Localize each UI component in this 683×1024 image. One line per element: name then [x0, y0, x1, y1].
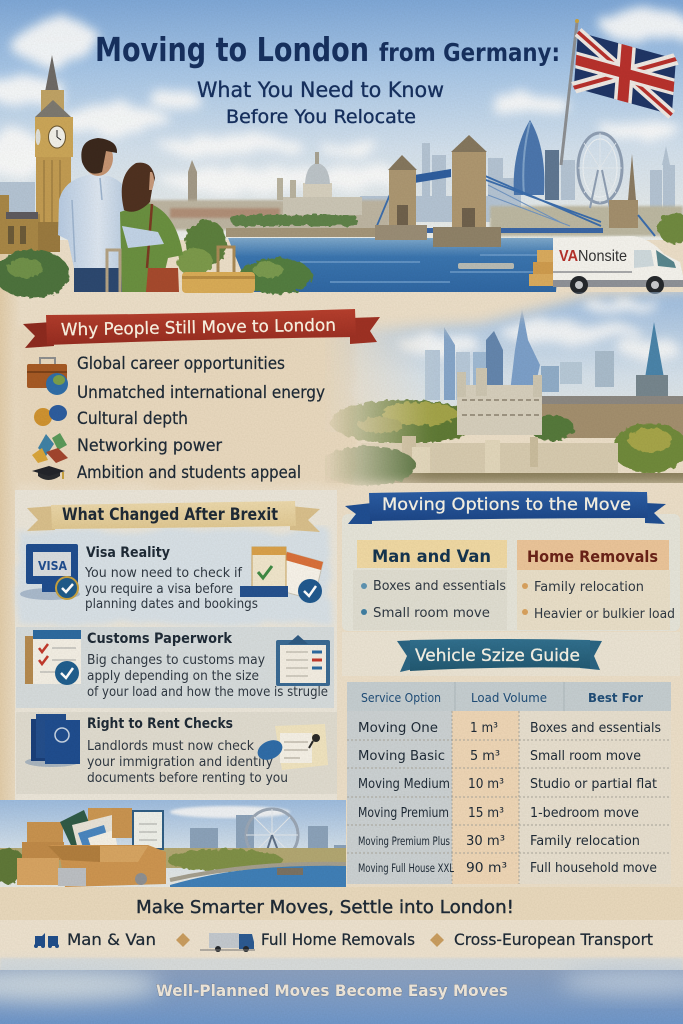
reasons list [27, 354, 325, 482]
vehicle size table [347, 682, 671, 884]
icon: graduation cap [32, 466, 65, 480]
van logo text: VANonsite [559, 248, 627, 265]
sky [0, 800, 346, 887]
row: moving premium: 15 m³ [468, 806, 504, 821]
item: Ambition and students appeal [77, 463, 301, 482]
item: Global career opportunities [77, 354, 285, 373]
column header [517, 540, 669, 570]
tan ribbon heading [27, 501, 320, 532]
gherkin tower [514, 120, 544, 195]
man's arm [122, 226, 164, 248]
row: moving premium plus: Family relocation [530, 834, 640, 849]
subtitle line 2: Before You Relocate [226, 106, 416, 128]
service: cross-european transport: Cross-European Transport [454, 930, 653, 949]
header text: Man and Van [372, 547, 491, 567]
parchment wash [15, 325, 355, 485]
header cell: Service Option [361, 691, 441, 705]
footer heading: Make Smarter Moves, Settle into London! [136, 897, 514, 918]
bullet [522, 583, 528, 589]
text: Landlords must now check [87, 738, 254, 754]
diamond [176, 933, 190, 947]
footer band [0, 887, 683, 972]
row: moving premium [358, 806, 639, 821]
header text: Home Removals [527, 547, 658, 566]
row: moving basic: Small room move [530, 749, 641, 764]
sky [0, 0, 683, 240]
st pauls cathedral [277, 152, 362, 215]
tan wash behind heading [0, 887, 683, 920]
text: you require a visa before [85, 581, 233, 597]
column: man and van [353, 540, 507, 630]
bullet [361, 583, 367, 589]
row: moving medium: Studio or partial flat [530, 777, 657, 792]
panel background [342, 514, 680, 631]
item: Cultural depth [77, 409, 188, 428]
row: moving medium: 10 m³ [468, 777, 504, 792]
panel background [18, 530, 330, 625]
icon: passports [25, 714, 80, 767]
visa label: VISA [38, 559, 68, 573]
small far tower and right bridge [609, 154, 655, 236]
title line 1 second part: from Germany: [379, 38, 560, 67]
red ribbon heading [23, 309, 380, 348]
service: man and van: Man & Van [67, 930, 156, 949]
row: moving premium: 1-bedroom move [530, 806, 639, 821]
icon: rental documents and key [254, 724, 328, 770]
pale left wash [0, 969, 160, 1001]
pale band under services [0, 958, 683, 972]
row: moving premium plus: 30 m³ [466, 834, 505, 849]
icon: documents [240, 547, 323, 603]
text: planning dates and bookings [85, 596, 258, 612]
row: moving basic: Moving Basic [358, 749, 445, 764]
heading: Visa Reality [86, 545, 170, 561]
row: moving one: Boxes and essentials [530, 721, 661, 736]
mid-ground city [70, 200, 683, 236]
river and bridge [170, 864, 346, 887]
panel light backing [15, 490, 337, 800]
section: why people still move to london [15, 292, 683, 486]
heading text: Vehicle Szize Guide [415, 646, 580, 665]
tower bridge [375, 135, 603, 247]
column background [353, 570, 507, 630]
icon: network blocks [32, 433, 68, 463]
title [95, 30, 560, 128]
moving boxes beside van [529, 250, 555, 286]
item: Networking power [77, 436, 222, 455]
diamond [430, 933, 444, 947]
block: right to rent checks [25, 714, 328, 786]
row: moving premium plus [358, 834, 640, 849]
heading text: What Changed After Brexit [62, 505, 278, 524]
panel: what changed after brexit [15, 490, 337, 800]
service: full home removals: Full Home Removals [261, 930, 415, 949]
text: Big changes to customs may [87, 652, 265, 668]
union jack flag on pole [561, 19, 676, 165]
row: moving premium plus: Moving Premium Plus [358, 834, 450, 848]
block: visa reality [20, 544, 323, 612]
item: Unmatched international energy [77, 383, 325, 402]
houses of parliament [0, 195, 60, 254]
man [58, 138, 139, 292]
heading: Right to Rent Checks [87, 716, 233, 732]
row: moving full house xxl: 90 m³ [466, 861, 507, 876]
title line 1: Moving to London [95, 30, 369, 69]
london eye [578, 133, 622, 208]
panel: moving options [342, 491, 680, 631]
clouds [170, 806, 290, 818]
column: home removals [517, 540, 675, 630]
option text: Family relocation [534, 579, 644, 595]
river thames [228, 238, 560, 292]
bottom-left illustration: boxes and london eye [0, 800, 346, 887]
icon: van [200, 933, 255, 952]
embankment [226, 228, 376, 237]
text: of your load and how the move is strugle [87, 684, 328, 700]
bullet [361, 609, 367, 615]
icon: clipboard [276, 635, 330, 686]
header cell: Best For [588, 691, 643, 705]
heading text: Moving Options to the Move [382, 495, 631, 514]
row: moving premium: Moving Premium [358, 806, 449, 821]
header cell: Load Volume [471, 691, 547, 705]
foreground trees [0, 220, 312, 298]
icon: checklist [25, 630, 81, 685]
hero illustration [0, 0, 683, 298]
tagline: Well-Planned Moves Become Easy Moves [156, 981, 508, 1000]
text: documents before renting to you [87, 770, 288, 786]
column background [517, 570, 670, 630]
far trees along bank [232, 215, 357, 226]
block: customs paperwork [25, 630, 330, 700]
bullet [522, 609, 528, 615]
heading text: Why People Still Move to London [61, 316, 336, 340]
right trees [658, 212, 683, 244]
big ben [35, 55, 73, 232]
option text: Small room move [373, 605, 490, 621]
table column fills [347, 711, 671, 884]
option text: Boxes and essentials [373, 578, 506, 594]
footer paper [0, 887, 683, 969]
suitcases [107, 247, 255, 293]
city buildings [190, 815, 346, 860]
couple looking at city [58, 138, 183, 292]
london skyline illustration [300, 292, 683, 486]
row: moving basic: 5 m³ [470, 749, 500, 764]
row: moving full house xxl: Moving Full House XXL [358, 861, 454, 875]
castle walls [361, 443, 618, 473]
icon: briefcase and globe [27, 358, 68, 395]
table header [347, 682, 671, 711]
row: moving full house xxl: Full household move [530, 861, 657, 876]
bottom blue water banner [0, 969, 683, 1024]
row: moving one: Moving One [358, 721, 438, 736]
woman [120, 163, 183, 292]
text: You now need to check if [84, 565, 243, 581]
row: moving medium [358, 777, 657, 792]
row: moving medium: Moving Medium [358, 777, 450, 792]
distant city skyline [0, 143, 675, 222]
london eye [246, 809, 298, 866]
row: moving one [358, 721, 661, 736]
row: moving basic [358, 749, 641, 764]
heading: Customs Paperwork [87, 631, 233, 647]
panel row bands [16, 712, 337, 794]
trees and town [0, 848, 346, 884]
text: apply depending on the size [87, 668, 259, 684]
icon: coin and speech bubble [34, 405, 67, 426]
column header [357, 540, 507, 568]
row: moving one: 1 m³ [470, 721, 498, 736]
vanonsite van [553, 236, 683, 294]
subtitle line 1: What You Need to Know [197, 78, 444, 102]
clouds [0, 9, 683, 193]
white tower [457, 368, 542, 435]
row: moving full house xxl [358, 861, 657, 876]
pale right wash [560, 970, 683, 994]
icon: visa monitor [20, 544, 80, 600]
cardboard boxes and paperwork [17, 808, 166, 887]
water wash [0, 970, 683, 1024]
text: your immigration and identify [87, 754, 273, 770]
teal ribbon heading: vehicle size guide [342, 632, 680, 676]
blue ribbon heading [345, 491, 666, 524]
icon: forklift people [34, 933, 59, 948]
